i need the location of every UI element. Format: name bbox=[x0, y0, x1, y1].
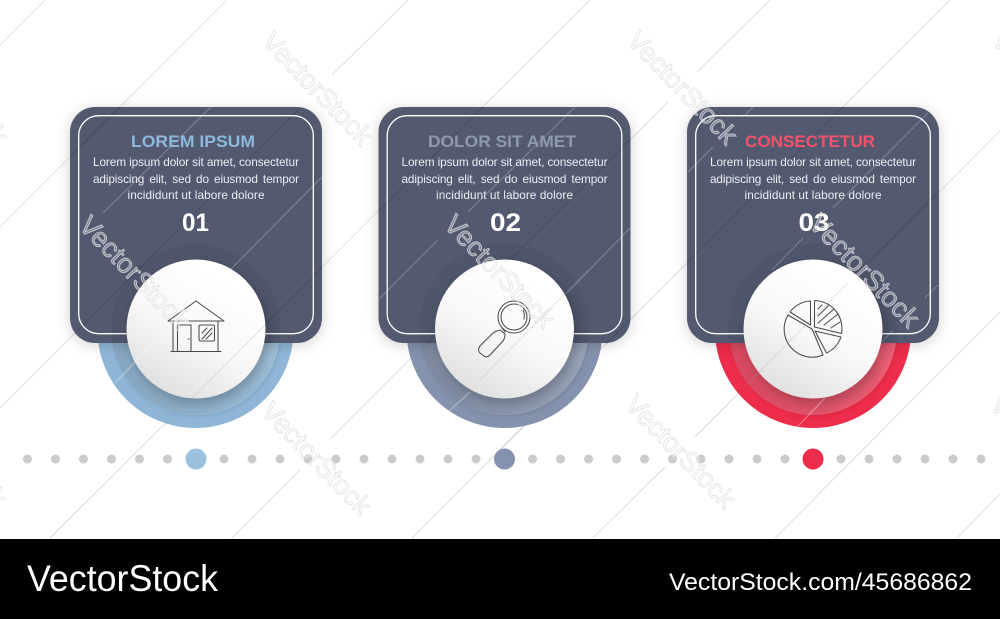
outer ring: slate bbox=[406, 232, 602, 428]
faint watermark lines over circles and rings bbox=[115, 268, 848, 450]
card 3 body text: adipiscing elit, sed do eiusmod tempor bbox=[710, 172, 916, 186]
halo on card 2 bbox=[420, 244, 590, 414]
footer image id: VectorStock.com/45686862 bbox=[669, 569, 972, 596]
card 2 body text: Lorem ipsum dolor sit amet, consectetur bbox=[402, 155, 608, 169]
card 2 body text: incididunt ut labore dolore bbox=[436, 188, 573, 202]
halo on card 3 bbox=[728, 244, 898, 414]
outer ring: red bbox=[715, 232, 911, 428]
card 3 watermark lines bbox=[688, 107, 938, 343]
footer logo: VectorStock bbox=[27, 558, 218, 599]
card 3 bbox=[687, 107, 939, 343]
step 2 bbox=[378, 107, 630, 428]
card 1 bbox=[70, 107, 322, 343]
white circle 1 bbox=[126, 260, 266, 398]
card 1 outline bbox=[79, 116, 313, 334]
watermark text: VectorStock bbox=[256, 26, 379, 152]
card 1 body text: Lorem ipsum dolor sit amet, consectetur bbox=[93, 155, 299, 169]
inner ring: red bbox=[729, 247, 897, 415]
card 2 body text: adipiscing elit, sed do eiusmod tempor bbox=[402, 172, 608, 186]
card 1 body text: incididunt ut labore dolore bbox=[128, 188, 265, 202]
card 3 title: CONSECTETUR bbox=[745, 132, 875, 151]
card 1 watermark lines bbox=[72, 107, 322, 343]
timeline marker 2 bbox=[494, 448, 515, 470]
card 3 body text: incididunt ut labore dolore bbox=[744, 188, 882, 202]
watermark text: VectorStock bbox=[621, 25, 744, 151]
card 1 body text: adipiscing elit, sed do eiusmod tempor bbox=[93, 172, 299, 186]
watermark text: VectorStock bbox=[803, 208, 926, 334]
watermark text: VectorStock bbox=[255, 396, 378, 522]
timeline marker 3 bbox=[802, 448, 824, 470]
inner ring: blue bbox=[112, 247, 280, 415]
watermark text: VectorStock bbox=[438, 209, 561, 335]
card 3 body text bbox=[710, 155, 916, 202]
card 2 number: 02 bbox=[490, 209, 521, 237]
watermark text: VectorStock bbox=[619, 389, 742, 515]
card 1 number: 01 bbox=[182, 209, 209, 237]
step 3 bbox=[687, 107, 939, 428]
inner ring: slate bbox=[420, 247, 588, 415]
icon: magnifying glass bbox=[478, 301, 530, 357]
outer ring: blue bbox=[98, 232, 294, 428]
watermark text: VectorStock bbox=[73, 210, 196, 336]
card 2 watermark lines bbox=[379, 107, 630, 343]
step 1 bbox=[70, 107, 322, 428]
timeline dots bbox=[23, 454, 986, 464]
halo on card 1 bbox=[111, 244, 281, 414]
card 2 title: DOLOR SIT AMET bbox=[428, 132, 577, 151]
card 2 bbox=[378, 107, 630, 343]
timeline marker 1 bbox=[186, 448, 206, 470]
card 1 title: LOREM IPSUM bbox=[131, 132, 255, 151]
card 2 body text bbox=[402, 155, 608, 202]
white circle 2 bbox=[435, 260, 574, 398]
icon: house bbox=[168, 301, 224, 352]
icon: pie chart bbox=[784, 300, 842, 357]
footer bar bbox=[0, 539, 1000, 619]
card 3 body text: Lorem ipsum dolor sit amet, consectetur bbox=[710, 155, 916, 169]
card 3 outline bbox=[696, 116, 930, 334]
card 3 number: 03 bbox=[798, 209, 830, 237]
card 2 outline bbox=[387, 116, 622, 334]
white circle 3 bbox=[744, 260, 882, 398]
card 1 body text bbox=[93, 155, 299, 202]
